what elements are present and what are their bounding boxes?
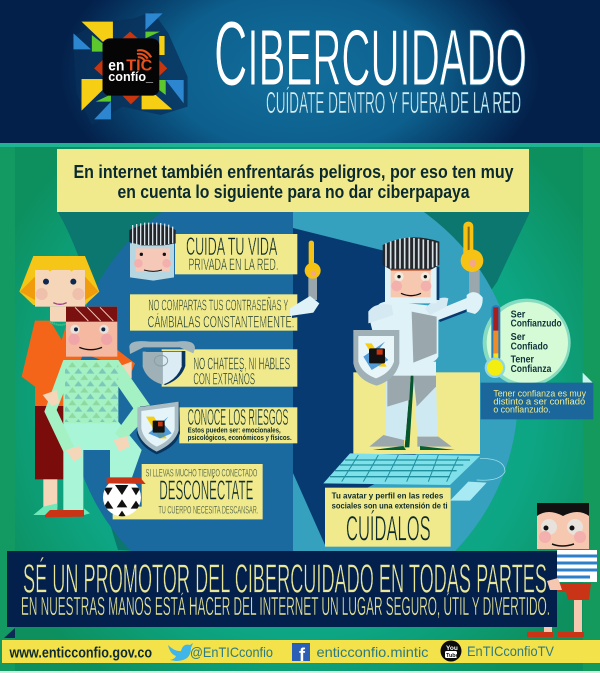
thermometer labels: Ser — [511, 309, 526, 320]
logo: en — [108, 56, 124, 74]
card: desconéctate: SI LLEVAS MUCHO TIEMPO CONECTADO — [146, 468, 257, 480]
laptop keyboard — [323, 453, 505, 501]
intro box — [57, 149, 529, 212]
icon: youtube: You — [446, 645, 458, 652]
thermometer panel — [483, 299, 571, 387]
card: cuídalos: Tu avatar y perfil en las redes — [332, 490, 444, 500]
boy hand — [547, 578, 562, 590]
icon: helmet face — [129, 223, 176, 281]
dark teal rays behind circle — [58, 212, 530, 560]
footer — [2, 640, 600, 665]
card: cuídalos: sociales son una extensión de ti — [332, 500, 448, 510]
card: cuídalos — [325, 488, 451, 549]
icon: winged shield — [129, 341, 195, 385]
facebook page: enticconfio.mintic — [316, 644, 428, 660]
callout: confianza: o confianzudo. — [493, 405, 551, 415]
left column: DESCONÉCTATE — [159, 474, 253, 505]
boy figure — [43, 307, 153, 517]
left column — [19, 223, 297, 519]
twitter handle: @EnTICconfio — [190, 644, 273, 660]
woman figure — [19, 256, 135, 515]
right column — [290, 222, 593, 549]
small boy — [527, 503, 597, 637]
card: no chatees — [162, 349, 297, 389]
logo: TIC — [126, 56, 152, 74]
card: cuida tu vida — [175, 233, 297, 274]
right arm and key — [433, 222, 483, 322]
callout: confianza — [481, 373, 593, 419]
logo — [73, 12, 188, 125]
header — [0, 0, 600, 143]
left key and arm — [290, 241, 321, 318]
callout: confianza: distinto a ser confiado — [493, 397, 585, 407]
thermometer labels: Confianzudo — [511, 319, 562, 330]
text: NO CHATEES, NI HABLES — [193, 353, 290, 373]
card: cuida tu vida: CUIDA TU VIDA — [186, 233, 277, 261]
card: cuida tu vida: PRIVADA EN LA RED. — [188, 255, 278, 274]
thermometer labels — [511, 309, 562, 375]
icon: logo shield — [137, 402, 180, 454]
card: contraseñas: CÁMBIALAS CONSTANTEMENTE. — [148, 313, 294, 332]
knight figure — [290, 222, 483, 450]
helmet head — [385, 267, 437, 303]
yellow backdrop — [353, 372, 480, 454]
card: no chatees: CON EXTRAÑOS — [193, 369, 255, 389]
card: desconéctate: TU CUERPO NECESITA DESCANSAR. — [158, 504, 258, 516]
card: conoce los riesgos: psicológicos, económicos y físicos. — [188, 435, 292, 442]
card: conoce los riesgos — [179, 404, 297, 443]
thermometer labels: Confiado — [511, 341, 548, 352]
website: www.enticconfio.gov.co — [9, 644, 152, 662]
logo: confío_ — [108, 70, 154, 85]
card: desconéctate — [113, 464, 263, 519]
card: contraseñas: NO COMPARTAS TUS CONTRASEÑAS Y — [148, 298, 288, 315]
card: cuídalos: CUÍDALOS — [346, 510, 431, 549]
text: CONOCE LOS RIESGOS — [188, 404, 288, 430]
icon: facebook: f — [299, 645, 306, 665]
icon: facebook — [292, 643, 310, 665]
icon: twitter — [168, 643, 193, 661]
card: conoce los riesgos: Estos pueden ser: emocionales, — [188, 427, 281, 434]
intro box: en cuenta lo siguiente para no dar ciberpapaya — [118, 182, 470, 202]
intro box: En internet también enfrentarás peligros, por eso ten muy — [74, 162, 514, 182]
knight shield — [353, 330, 399, 386]
youtube channel: EnTICconfioTV — [467, 643, 555, 659]
blue circle — [68, 170, 518, 620]
soccer ball — [103, 477, 146, 518]
thermometer labels: Confianza — [511, 364, 552, 375]
icon: youtube — [440, 640, 462, 662]
torso and legs — [405, 375, 414, 447]
thermometer labels: Ser — [511, 332, 526, 343]
callout: confianza: Tener confianza es muy — [493, 389, 586, 399]
thermometer labels: Tener — [511, 355, 534, 366]
promo banner — [4, 551, 557, 638]
icon: youtube: Tube — [446, 653, 459, 659]
card: contraseñas — [130, 294, 297, 332]
